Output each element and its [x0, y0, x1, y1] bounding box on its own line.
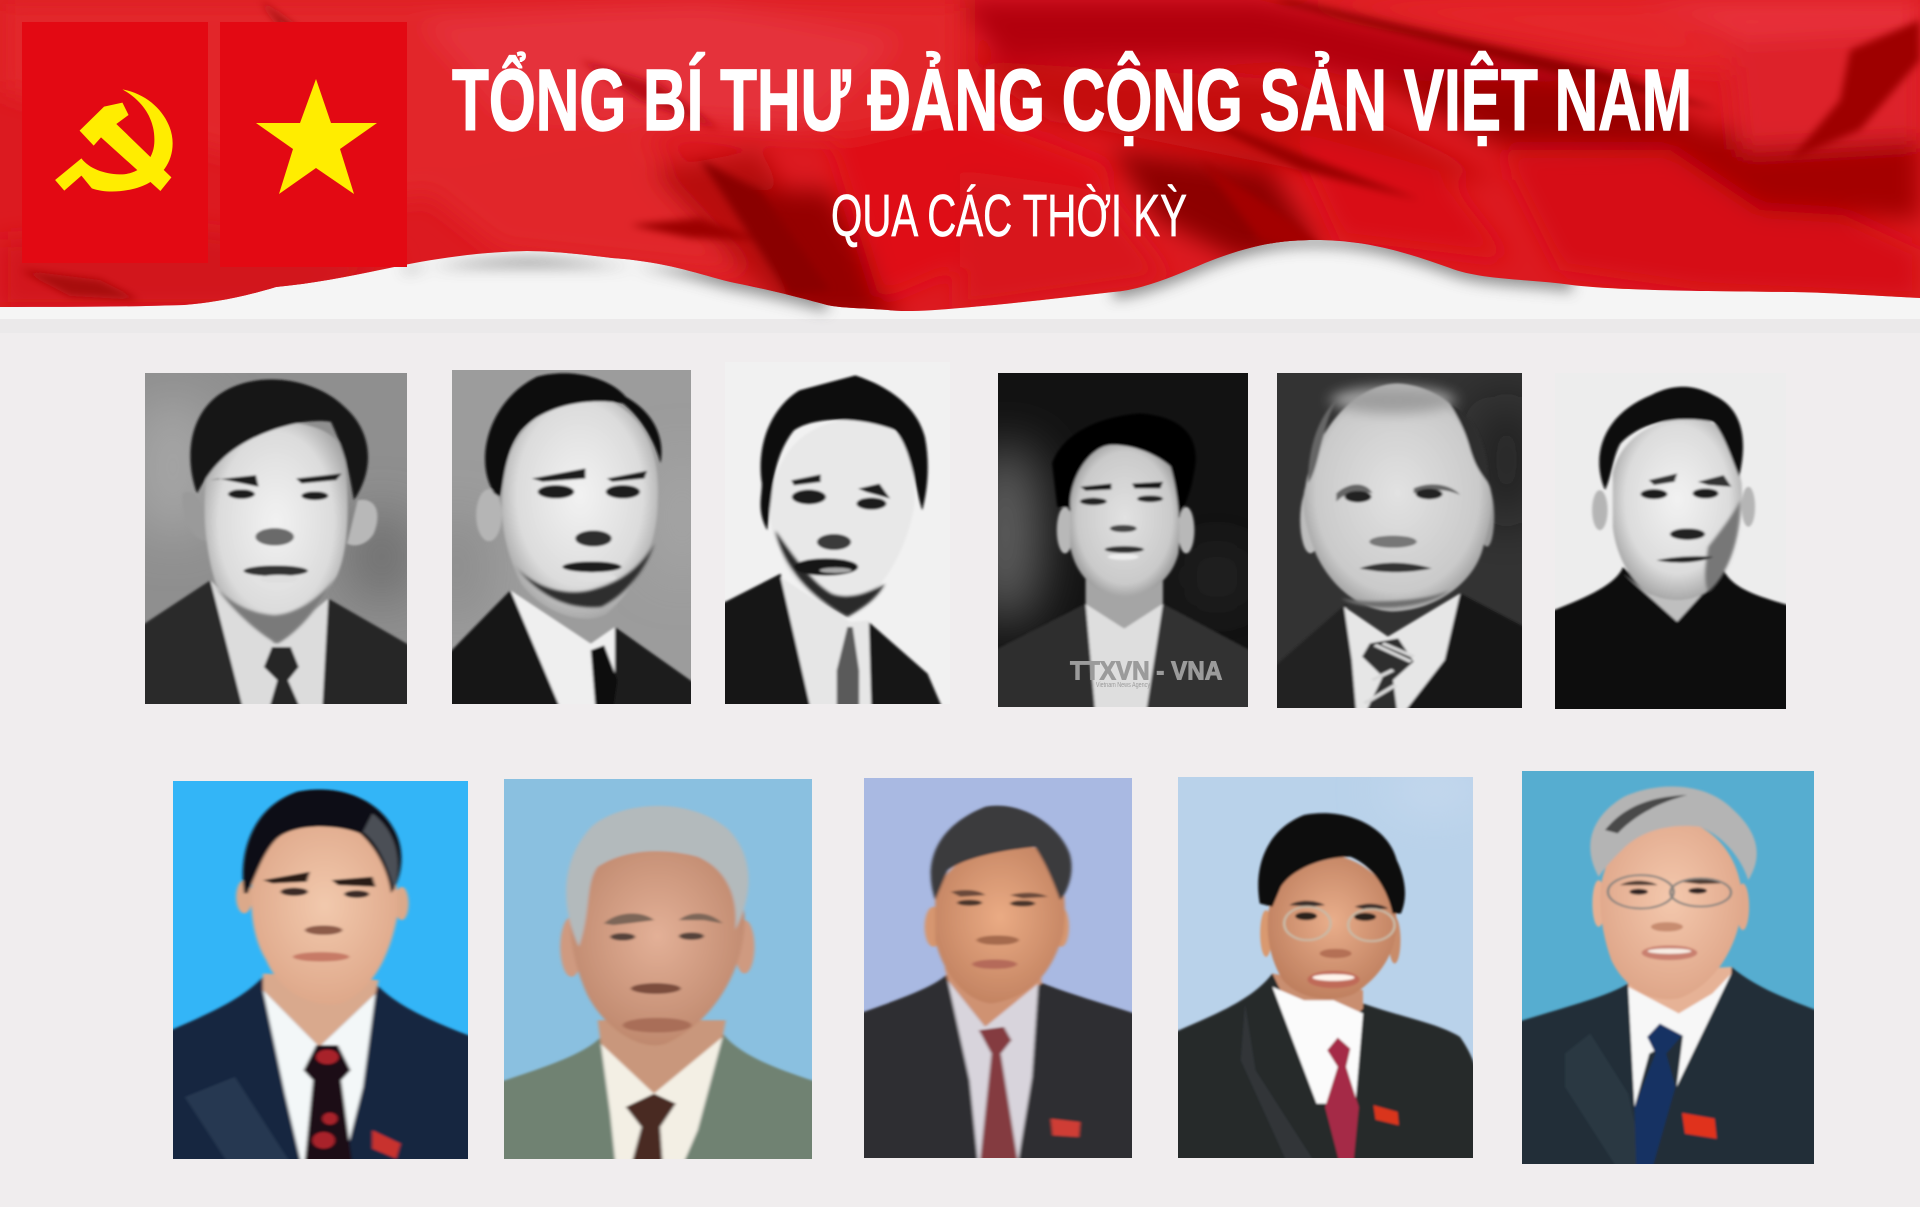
- watermark text: Vietnam News Agency: [1096, 681, 1150, 689]
- portrait 11: [1522, 771, 1814, 1164]
- portrait 1: [145, 373, 407, 704]
- icon: national flag with yellow star: [220, 22, 407, 267]
- portrait 3: [725, 374, 943, 704]
- portrait 4: [998, 373, 1248, 707]
- portrait 10: [1178, 777, 1473, 1158]
- banner: waving red flag: [0, 0, 1920, 320]
- subtitle: QUA CÁC THỜI KỲ: [831, 183, 1187, 249]
- portrait 7: [173, 781, 468, 1159]
- portrait 9: [864, 778, 1132, 1158]
- portrait 8: [504, 779, 812, 1159]
- portrait 6: [1555, 384, 1786, 709]
- portrait 2: [452, 370, 691, 704]
- portrait 5: [1277, 373, 1522, 708]
- white cloth strip under the banner: [0, 230, 1920, 333]
- icon: party flag with hammer and sickle: [22, 22, 208, 263]
